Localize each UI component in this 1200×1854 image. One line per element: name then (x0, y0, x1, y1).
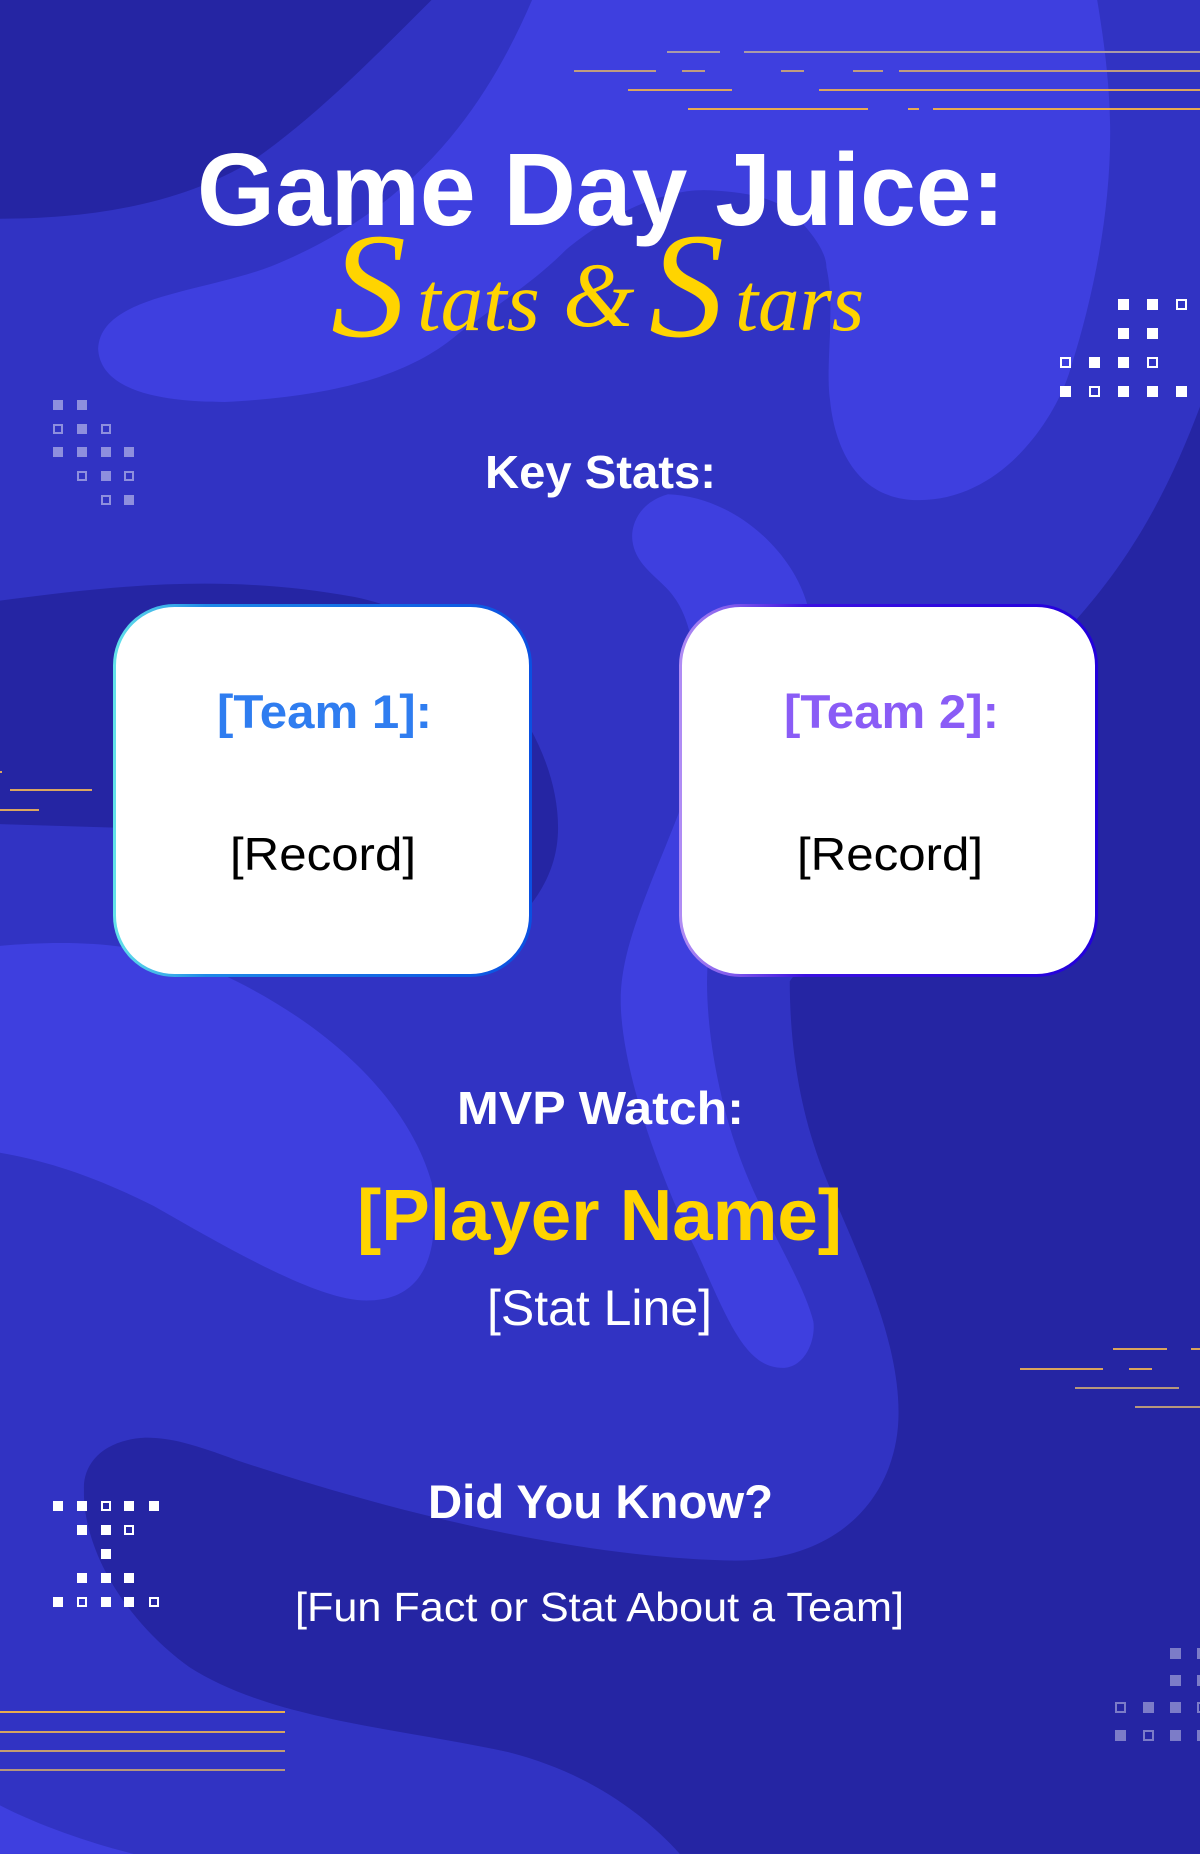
heading: did you know: Did You Know? (428, 1475, 773, 1528)
dots bottom right (1115, 1648, 1200, 1741)
fun fact: [Fun Fact or Stat About a Team] (295, 1584, 904, 1630)
gold lines top right (574, 52, 1200, 109)
subtitle: tats (417, 255, 561, 349)
gold lines left (0, 772, 92, 810)
dots top right (1060, 299, 1187, 397)
dots bottom left (53, 1501, 159, 1607)
team 2 record: [Record] (797, 828, 983, 880)
panel: team 2 (680, 606, 1096, 976)
player name: [Player Name] (357, 1176, 842, 1256)
subtitle: S (331, 203, 406, 369)
gold lines middle right (1020, 1349, 1200, 1407)
subtitle: & (563, 244, 658, 346)
gold lines bottom left (0, 1712, 285, 1770)
subtitle: tars (735, 256, 864, 348)
team 1 name: [Team 1]: (217, 685, 432, 738)
stat line: [Stat Line] (487, 1280, 712, 1336)
title: Game Day Juice: (197, 132, 1005, 247)
team 1 record: [Record] (230, 828, 416, 880)
subtitle: S (649, 203, 724, 369)
heading: key stats: Key Stats: (485, 446, 716, 498)
heading: mvp watch: MVP Watch: (457, 1082, 744, 1134)
team 2 name: [Team 2]: (784, 685, 999, 738)
panel: team 1 (114, 606, 530, 976)
dots top left (53, 400, 134, 505)
